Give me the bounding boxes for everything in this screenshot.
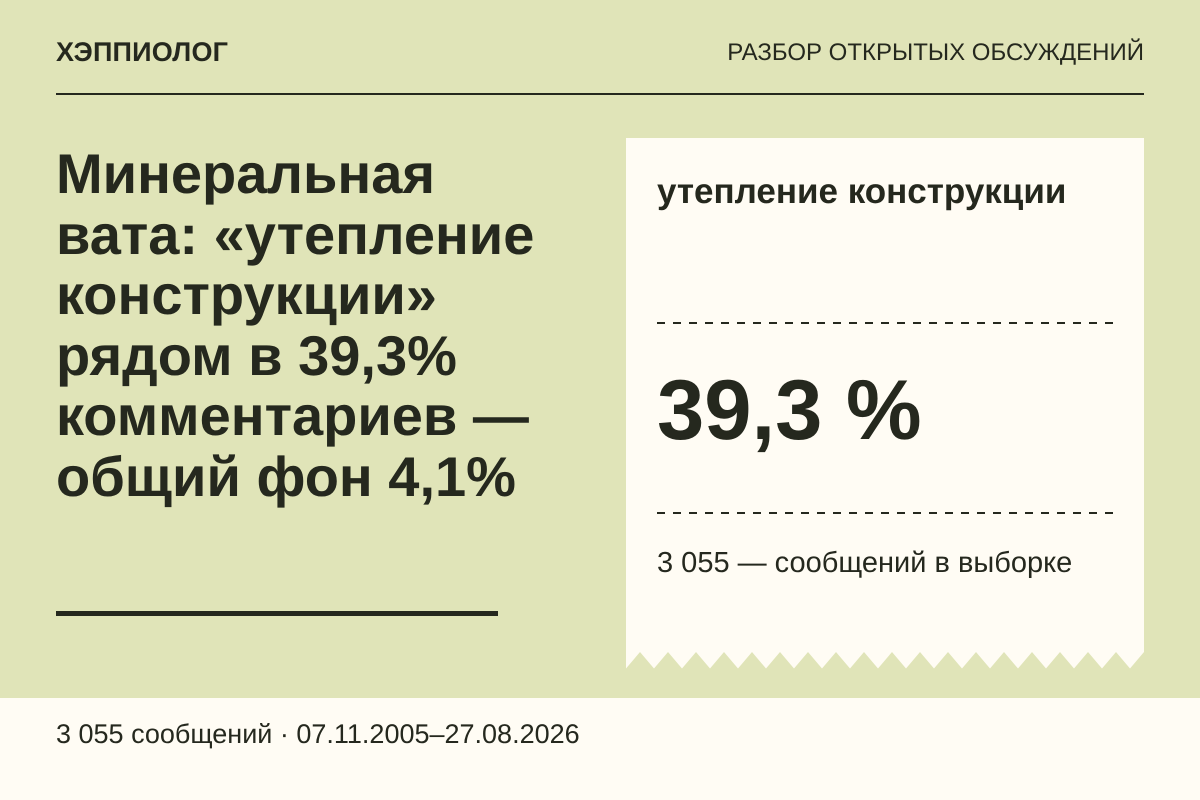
panel: receipt card <box>626 138 1144 668</box>
brand name: ХЭППИОЛОГ <box>56 37 228 67</box>
sample size note: 3 055 — сообщений в выборке <box>657 547 1072 579</box>
main headline: рядом в 39,3% <box>56 324 457 386</box>
headline accent rule <box>56 611 498 616</box>
card label: утепление конструкции <box>657 172 1066 211</box>
footer text: 3 055 сообщений · 07.11.2005–27.08.2026 <box>56 719 580 749</box>
main headline: Минеральная <box>56 142 435 205</box>
main headline: общий фон 4,1% <box>56 444 516 508</box>
header caption: РАЗБОР ОТКРЫТЫХ ОБСУЖДЕНИЙ <box>727 39 1144 66</box>
big percentage: 39,3 % <box>657 363 922 458</box>
main headline: комментариев — <box>56 384 529 447</box>
main headline: вата: «утепление <box>56 202 534 266</box>
main headline <box>56 142 534 508</box>
footer band <box>0 698 1200 800</box>
main headline: конструкции» <box>56 263 437 326</box>
header rule <box>56 93 1144 95</box>
